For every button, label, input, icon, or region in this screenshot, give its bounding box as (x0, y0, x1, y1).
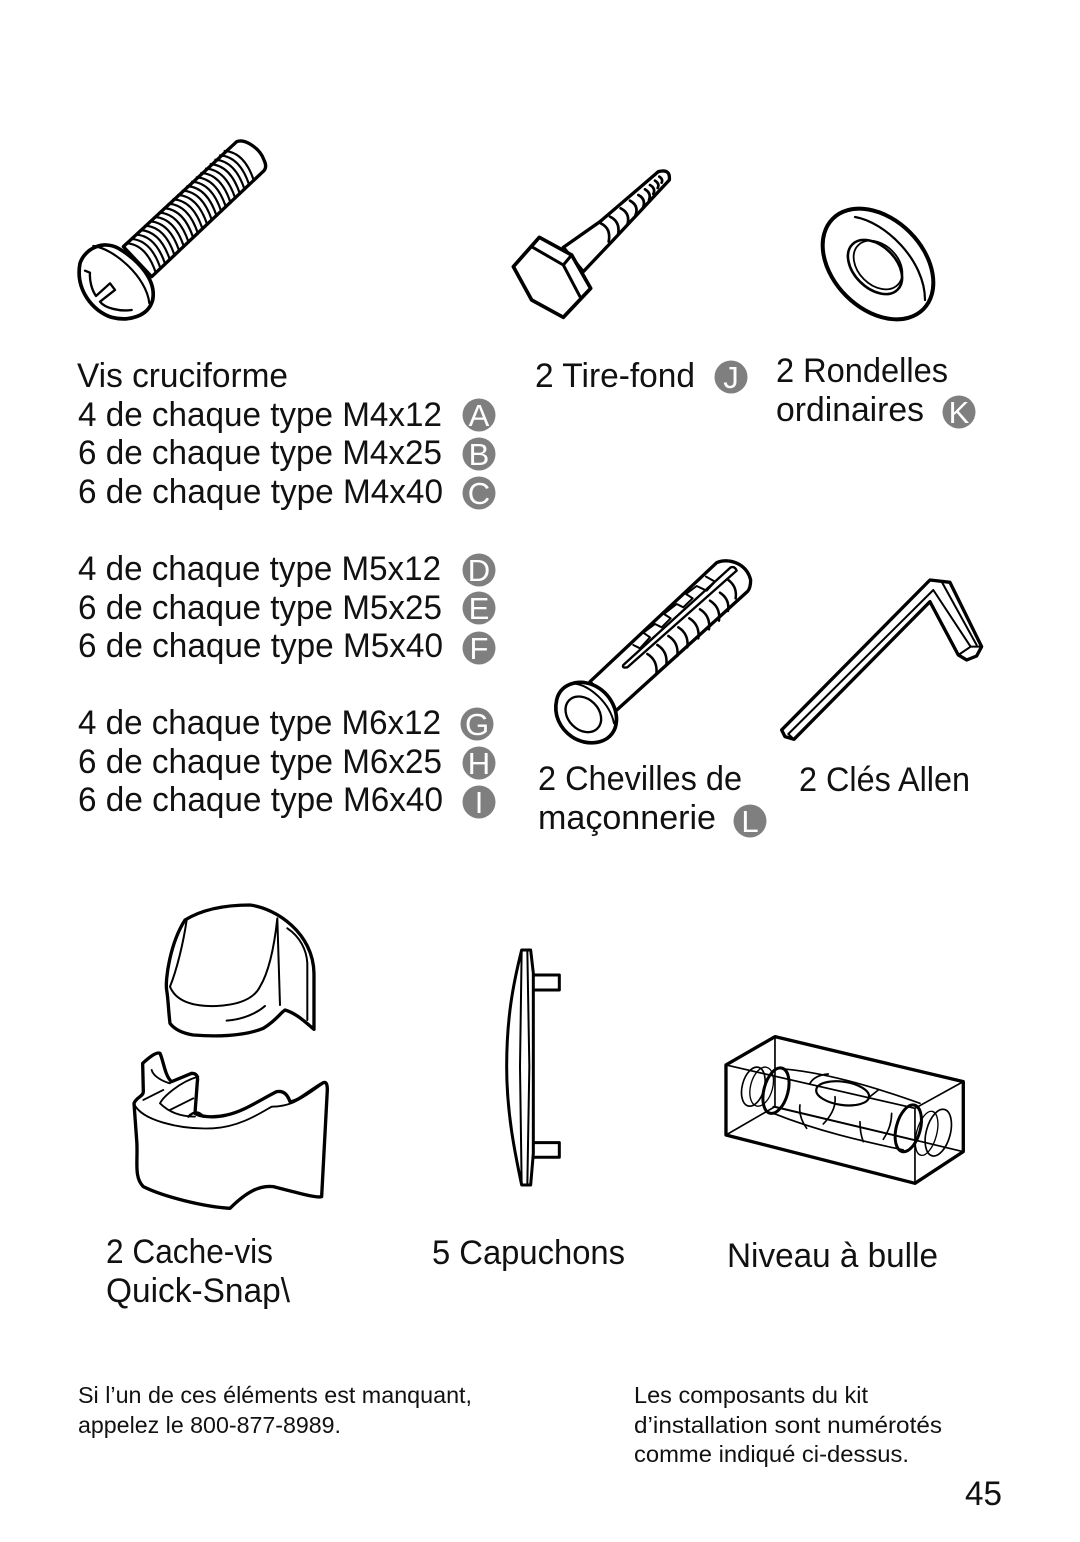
note: kit numbering (634, 1382, 942, 1467)
badge K: K (949, 395, 970, 430)
badge D: D (468, 553, 490, 588)
text: M6x40: 6 de chaque type M6x40 (78, 781, 443, 819)
icon: cross-head screw (79, 141, 266, 319)
icon: allen key (782, 580, 982, 739)
badge J (714, 360, 748, 395)
note: missing parts: Si l’un de ces éléments est manquant, (78, 1382, 472, 1408)
text: spirit level: Niveau à bulle (727, 1237, 938, 1275)
badge K (942, 395, 976, 430)
icon: cap (507, 950, 559, 1185)
page number: 45 (965, 1475, 1002, 1513)
cover top (166, 905, 314, 1036)
badge G: G (465, 707, 489, 742)
text: screws heading: Vis cruciforme (77, 357, 288, 395)
text: M4x25: 6 de chaque type M4x25 (78, 434, 442, 472)
note: kit numbering: Les composants du kit (634, 1382, 868, 1408)
text: M6x25: 6 de chaque type M6x25 (78, 743, 442, 781)
text: washers line 2: ordinaires (776, 391, 924, 429)
badge C (462, 476, 496, 511)
icon: spirit level (726, 1037, 963, 1183)
badge A (462, 398, 496, 433)
badge A: A (469, 398, 490, 433)
text: M4x12: 4 de chaque type M4x12 (78, 396, 442, 434)
text: allen keys: 2 Clés Allen (799, 761, 970, 799)
text: anchors line 2: maçonnerie (538, 799, 716, 837)
badge I: I (475, 785, 483, 820)
badge B: B (469, 437, 489, 472)
icon: Quick-Snap cover (134, 905, 327, 1208)
badge E (462, 591, 496, 626)
badge F: F (470, 631, 488, 666)
icon: lag bolt (513, 171, 669, 317)
icon: washer (801, 187, 955, 341)
badge H (462, 746, 496, 781)
cover base (134, 1053, 327, 1208)
text: covers line 1: 2 Cache-vis (106, 1233, 273, 1271)
badge E: E (469, 591, 489, 626)
icon: masonry anchor (556, 561, 751, 743)
text: lag bolts: 2 Tire-fond (535, 357, 695, 395)
badge F (462, 631, 496, 666)
note: kit numbering: d’installation sont numérotés (634, 1412, 942, 1438)
note: missing parts (78, 1382, 472, 1438)
badge H: H (468, 746, 490, 781)
badge C: C (468, 476, 490, 511)
note: missing parts: appelez le 800-877-8989. (78, 1412, 341, 1438)
note: kit numbering: comme indiqué ci-dessus. (634, 1441, 909, 1467)
text: M5x25: 6 de chaque type M5x25 (78, 589, 442, 627)
text: anchors line 1: 2 Chevilles de (538, 760, 742, 798)
badge B (462, 437, 496, 472)
badge I (462, 785, 496, 820)
text: M5x40: 6 de chaque type M5x40 (78, 627, 443, 665)
badge L (734, 804, 766, 839)
text: covers line 2: Quick-Snap\ (106, 1272, 291, 1310)
text: washers line 1: 2 Rondelles (776, 352, 948, 390)
text: M5x12: 4 de chaque type M5x12 (78, 550, 441, 588)
text: M6x12: 4 de chaque type M6x12 (78, 704, 441, 742)
text: caps: 5 Capuchons (432, 1234, 625, 1272)
badge L: L (741, 804, 759, 839)
text: M4x40: 6 de chaque type M4x40 (78, 473, 443, 511)
badge J: J (723, 360, 739, 395)
badge D (462, 553, 496, 588)
